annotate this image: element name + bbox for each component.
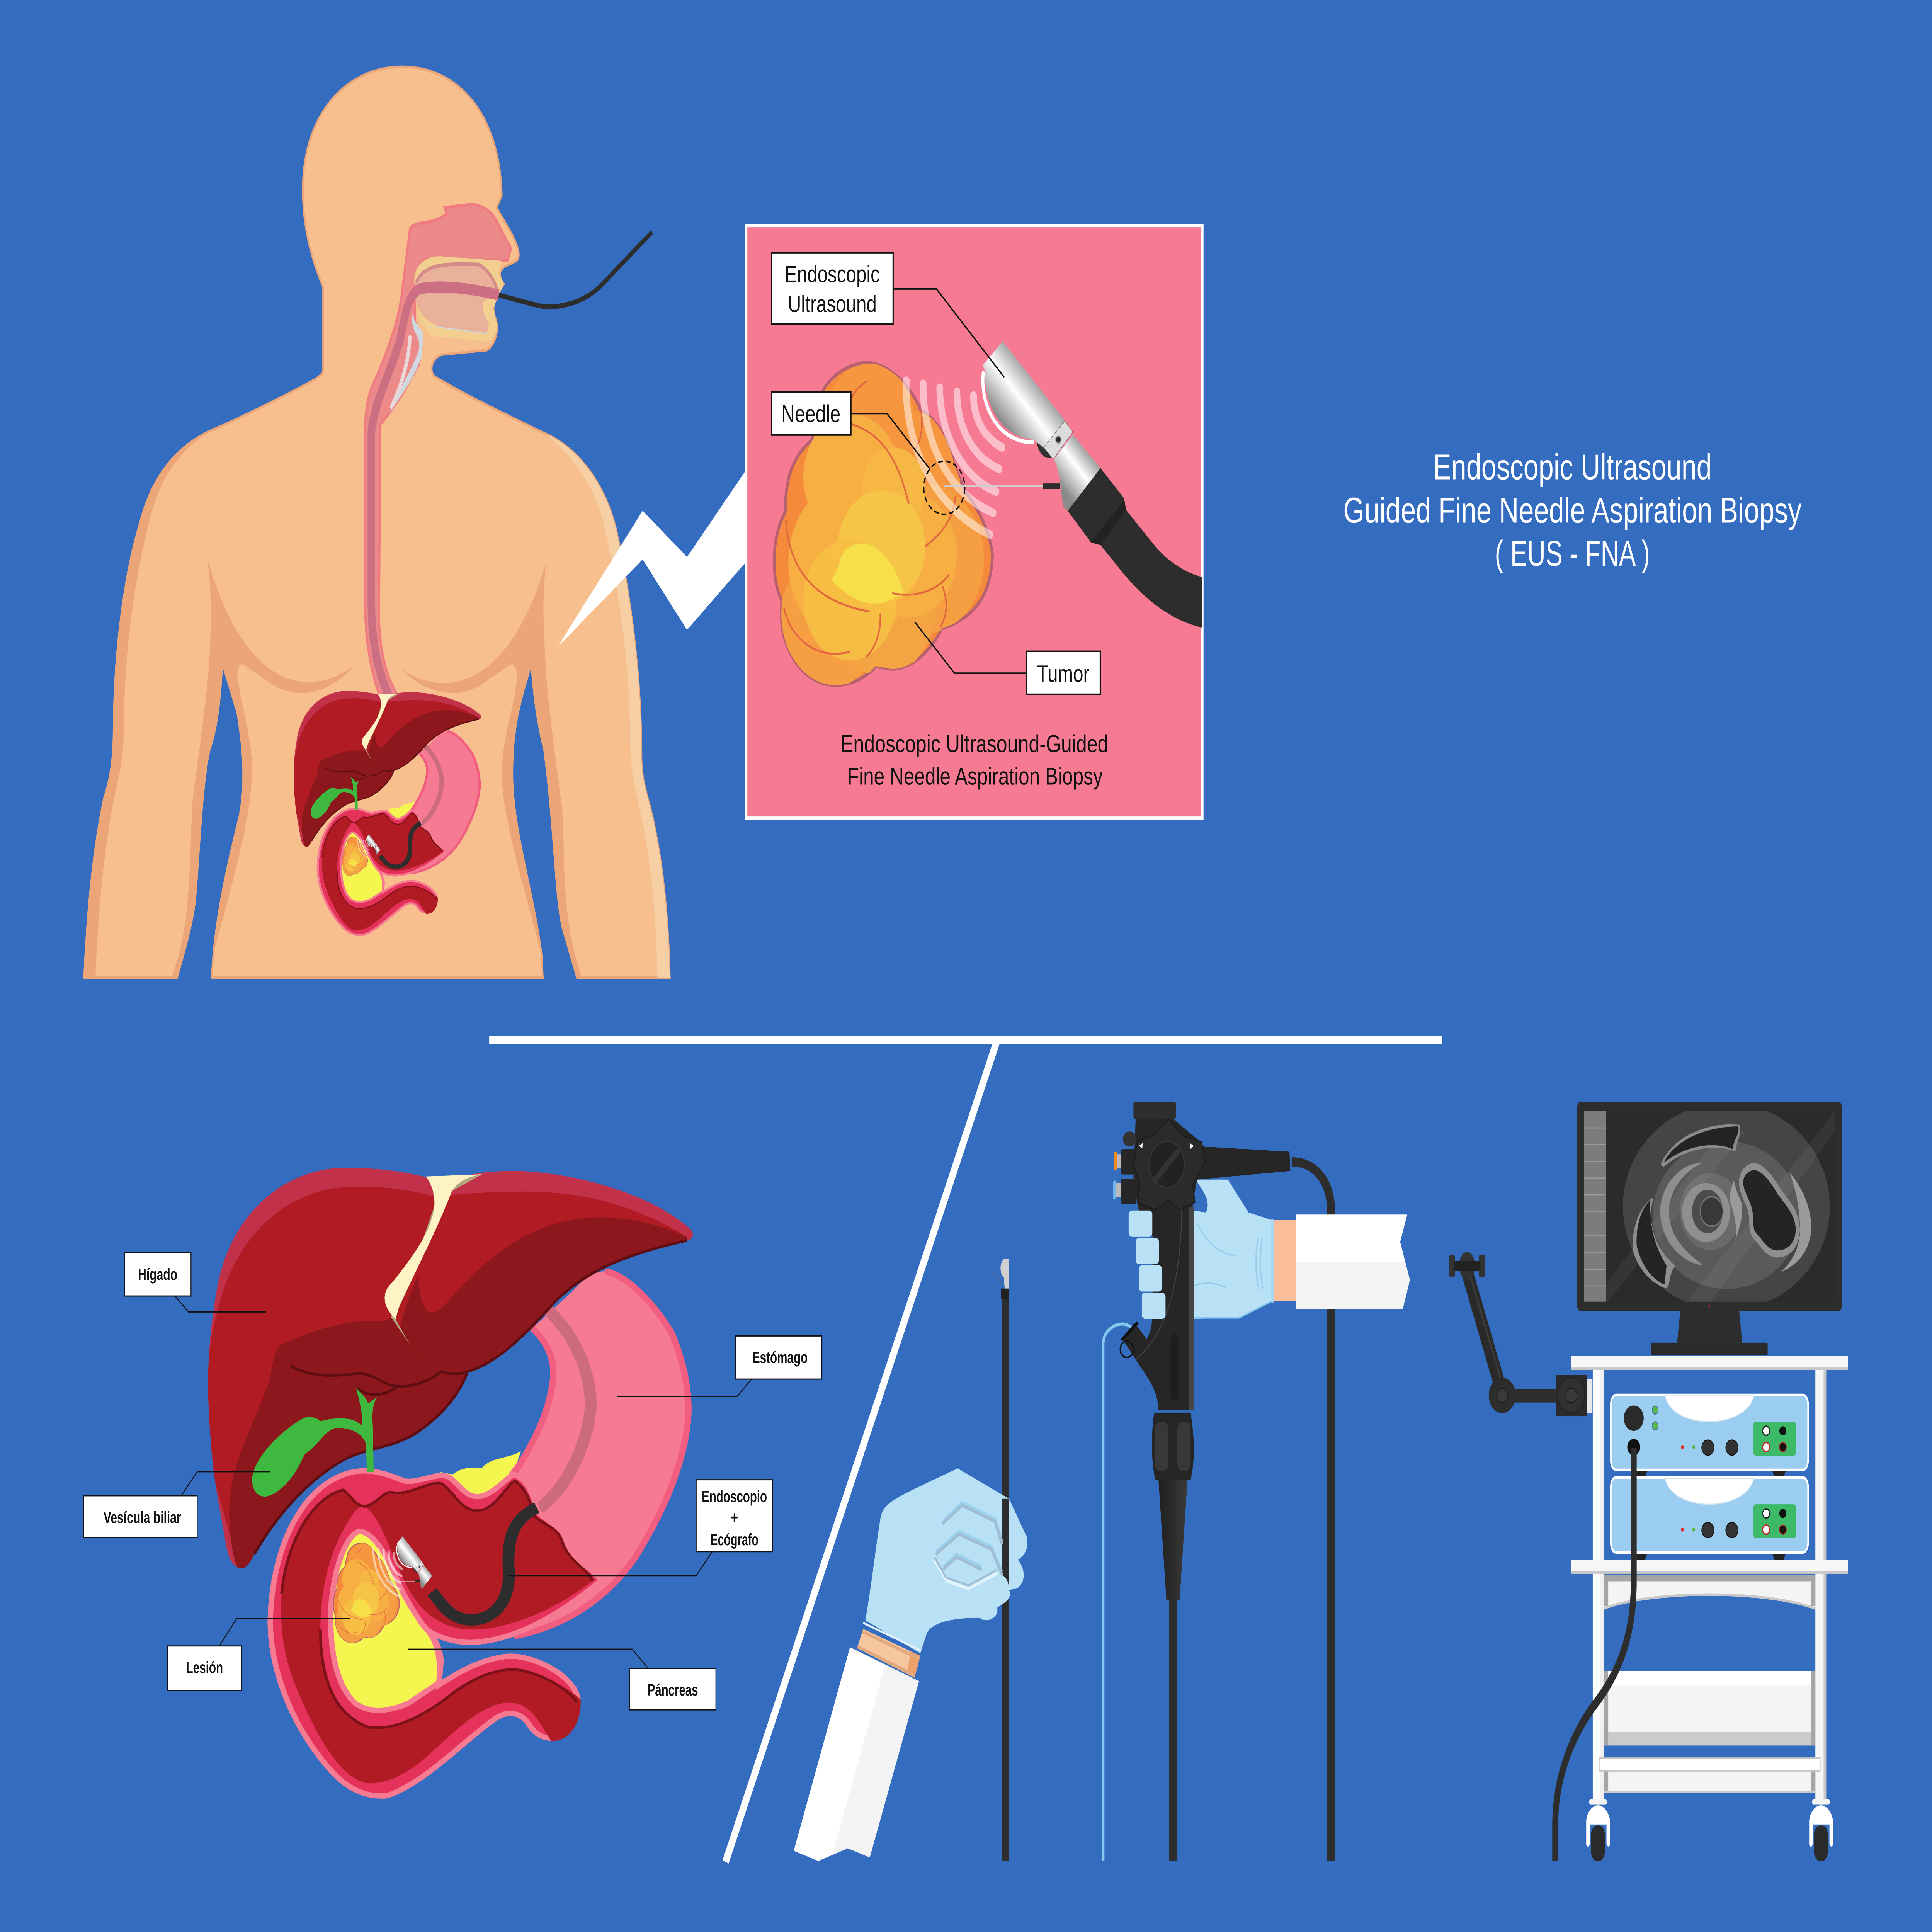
label: pancreas [408,1649,716,1710]
middle shelf [1571,1560,1848,1574]
label: endoscopio ecografo [508,1480,772,1576]
label: endoscopio ecografo: Endoscopio [702,1487,767,1506]
trachea highlight [392,337,410,406]
power cable [1555,1448,1634,1861]
body silhouette [84,67,670,978]
blue irrigation line [1103,1324,1136,1861]
chest and underarm shading left [172,560,354,978]
label: endoscopic ultrasound: Endoscopic [785,261,880,287]
equipment: ultrasound cart [1449,1102,1848,1861]
title: ( EUS - FNA ) [1495,533,1650,573]
duodenum inner wall [281,1481,592,1783]
label: higado [124,1253,266,1312]
liver shaded lobes [204,1187,687,1577]
label: lesion [168,1619,350,1691]
endoscope grip [1152,1413,1194,1480]
label: higado: Hígado [138,1265,177,1284]
liver lower edge [254,1240,687,1554]
panel caption: Endoscopic Ultrasound-Guided [840,730,1108,757]
finger pads [1129,1211,1165,1319]
label: vesicula biliar [84,1472,270,1537]
tumor [774,363,992,688]
upper palate line [416,264,498,290]
caster right [1809,1799,1833,1861]
label: estomago [617,1336,822,1397]
title: Guided Fine Needle Aspiration Biopsy [1343,490,1802,531]
monitor stand [1677,1311,1742,1343]
stomach rim [514,1271,689,1636]
panel: tumor close-up [746,226,1204,818]
stomach body [487,1271,689,1636]
right cable [1292,1162,1331,1861]
epiglottis [389,310,487,413]
glove hand on endoscope [1190,1180,1298,1319]
monitor [1577,1102,1842,1311]
large organs diagram [204,1168,693,1796]
bottom rail [1599,1758,1820,1793]
ultrasound probe head [983,341,1100,511]
panel caption: Fine Needle Aspiration Biopsy [847,762,1103,790]
control wheel [1133,1119,1205,1210]
glove hand holding rod [863,1468,1027,1653]
tumor and probe artwork [774,341,1100,688]
ultrasound waves [906,381,1002,534]
lab coat sleeve left [794,1647,919,1861]
label: endoscopic ultrasound [772,253,1004,377]
mouth outer tissue [414,256,504,341]
duodenum and lower stomach [270,1471,601,1796]
label: pancreas: Páncreas [648,1681,698,1699]
label: tumor [915,622,1100,694]
wrist left [857,1629,920,1678]
gallbladder and bile duct [252,1388,378,1497]
human torso illustration [84,67,670,978]
small organs inside torso [292,691,481,935]
lightning connector [558,469,747,647]
device feet [1637,1470,1786,1561]
label: vesicula biliar: Vesícula biliar [104,1508,181,1526]
label: endoscopio ecografo: + [731,1508,738,1526]
articulated arm [1449,1252,1592,1416]
lower processor unit [1611,1478,1808,1553]
panel frame [746,226,1202,818]
valve buttons [1113,1131,1136,1204]
scope lower cord [1169,1597,1177,1861]
label: needle [772,392,930,469]
endoscope handle [1120,1102,1290,1410]
endoscope taper [1158,1480,1187,1600]
label: endoscopio ecografo: Ecógrafo [710,1531,759,1549]
shelf bracket [1604,1575,1815,1609]
falciform ligament [391,1174,482,1344]
endoscope cable outside mouth [499,232,652,307]
endoscope black sleeve [1068,468,1204,628]
label: endoscopic ultrasound: Ultrasound [788,290,877,317]
liver [208,1168,693,1568]
divider lines [489,1036,1442,1862]
title: Endoscopic Ultrasound [1433,447,1712,487]
right arm highlight [546,434,670,978]
top shelf [1571,1356,1848,1370]
small tumor and probe [333,1536,432,1643]
caster left [1586,1799,1610,1861]
esophagus inner line [371,287,499,697]
organ labels [84,1253,822,1710]
label: lesion: Lesión [186,1658,223,1677]
title [1343,447,1802,573]
tongue and oral cavity [414,264,498,333]
left arm shading [84,431,210,978]
pancreas head [331,1531,440,1710]
panel caption [840,730,1108,790]
inner wall shadow line [282,1481,592,1728]
label: needle: Needle [781,400,840,427]
needle [944,485,1060,487]
chest and underarm shading right [401,563,582,978]
pancreas upper part [405,1451,521,1501]
label: estomago: Estómago [752,1349,808,1367]
label: tumor: Tumor [1037,660,1089,687]
lower drawer [1604,1671,1815,1745]
needle target circle [924,461,965,514]
falciform ligament highlight [385,1174,482,1319]
stomach fold [537,1308,591,1510]
equipment: needle and endoscope [794,1102,1410,1861]
cart legs [1593,1370,1826,1803]
monitor base [1651,1343,1768,1355]
lab coat sleeve right [1296,1214,1410,1309]
needle catheter rod [992,1259,1009,1861]
upper processor unit [1611,1395,1808,1470]
endoscope tube inside stomach [432,1508,537,1620]
pharynx and esophagus [365,204,511,694]
